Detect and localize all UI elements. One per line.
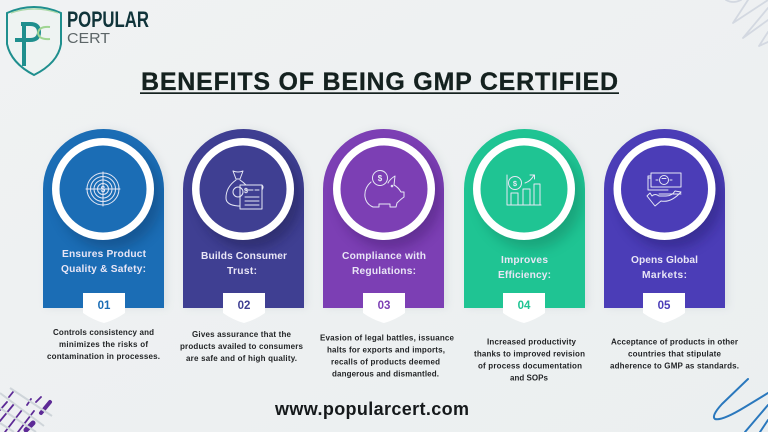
description: countries that stipulate — [628, 350, 722, 358]
description: products availed to consumers — [180, 342, 304, 351]
logo shield — [7, 7, 61, 75]
card heading: Builds Consumer — [201, 251, 287, 262]
description: adherence to GMP as standards. — [610, 362, 739, 370]
number badge 05: 05 — [658, 300, 671, 312]
icon: target with dollar — [86, 172, 120, 206]
logo wordmark: POPULAR — [67, 7, 149, 32]
icon: money bag and invoice: $ — [244, 188, 248, 195]
panel: opens global markets — [604, 129, 739, 370]
description: Controls consistency and — [53, 328, 154, 337]
card shape with ring — [604, 129, 728, 308]
card heading: Quality & Safety: — [61, 264, 146, 275]
card heading — [342, 251, 426, 277]
icon: bar chart with coin: $ — [513, 179, 518, 188]
icon: bar chart with coin — [507, 175, 541, 205]
card heading: Opens Global — [631, 255, 698, 266]
panel: compliance with regulations — [320, 129, 455, 378]
title: BENEFITS OF BEING GMP CERTIFIED — [141, 68, 618, 96]
icon: piggy bank: $ — [378, 174, 383, 183]
number badge 04: 04 — [518, 300, 531, 312]
number badge 03 — [363, 293, 405, 323]
description: thanks to improved revision — [474, 350, 585, 358]
card heading — [631, 255, 698, 281]
card shape with ring — [323, 129, 447, 308]
card heading — [61, 249, 147, 275]
description — [610, 338, 739, 370]
number badge 03: 03 — [378, 300, 390, 312]
description — [320, 334, 455, 378]
description — [474, 338, 585, 382]
panel: ensures product quality and safety — [43, 129, 167, 361]
number badge 01: 01 — [98, 300, 111, 312]
description: and SOPs — [510, 374, 549, 382]
description: Acceptance of products in other — [611, 338, 738, 346]
description: recalls of products deemed — [331, 358, 440, 366]
number badge 02 — [223, 293, 265, 323]
card heading — [201, 251, 287, 277]
number badge 04 — [503, 293, 545, 323]
description — [180, 330, 304, 363]
icon: target with dollar: $ — [101, 185, 106, 194]
description: halts for exports and imports, — [327, 346, 445, 354]
website footer: www.popularcert.com — [274, 399, 469, 419]
card heading: Markets: — [642, 270, 687, 281]
number badge 02: 02 — [238, 300, 250, 312]
logo wordmark: CERT — [67, 30, 110, 47]
card heading: Ensures Product — [62, 249, 147, 260]
description: Gives assurance that the — [192, 330, 292, 339]
icon: piggy bank — [365, 170, 404, 207]
icon: hand holding banknotes — [647, 173, 681, 206]
card heading: Regulations: — [352, 266, 416, 277]
card shape with ring — [183, 129, 307, 308]
description: of process documentation — [478, 362, 582, 370]
description: Increased productivity — [487, 338, 577, 346]
description — [47, 328, 160, 361]
card heading — [498, 255, 551, 281]
description: are safe and of high quality. — [186, 354, 297, 363]
description: Evasion of legal battles, issuance — [320, 334, 455, 342]
card heading: Trust: — [227, 266, 257, 277]
decoration: bottom-left purple grid — [0, 388, 52, 432]
description: dangerous and dismantled. — [332, 370, 439, 378]
description: contamination in processes. — [47, 352, 160, 361]
logo wordmark — [67, 7, 149, 47]
logo — [7, 7, 149, 75]
panel: improves efficiency — [464, 129, 588, 382]
card shape with ring — [43, 129, 167, 308]
icon: money bag and invoice — [226, 171, 263, 209]
card heading: Efficiency: — [498, 270, 551, 281]
card heading: Compliance with — [342, 251, 426, 262]
panel: builds consumer trust — [180, 129, 307, 363]
number badge 05 — [643, 293, 685, 323]
card heading: Improves — [501, 255, 548, 266]
number badge 01 — [83, 293, 125, 323]
card shape with ring — [464, 129, 588, 308]
decoration: bottom-right blue scribble — [714, 379, 768, 432]
description: minimizes the risks of — [59, 340, 148, 349]
decoration: top-right scribble — [726, 0, 768, 46]
